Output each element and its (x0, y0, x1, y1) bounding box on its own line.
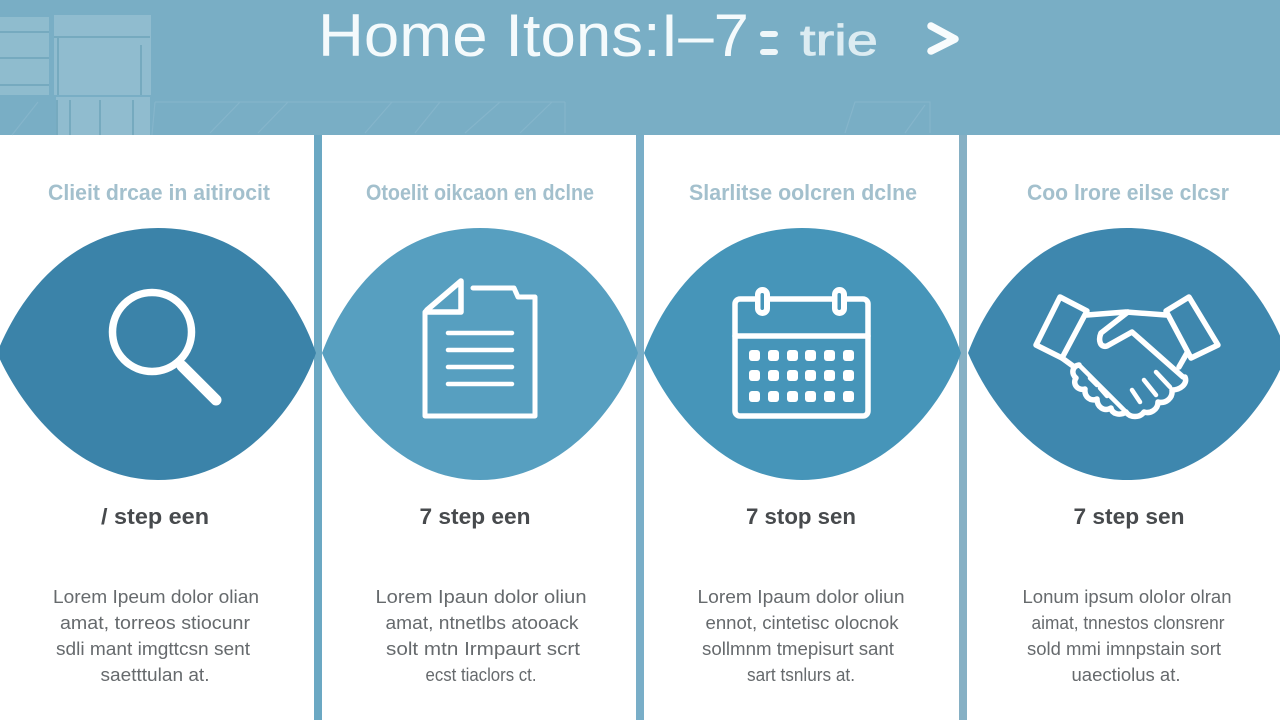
body text 3: ennot, cintetisc olocnok (706, 612, 899, 633)
title (318, 2, 955, 69)
column heading 1: Clieit drcae in aitirocit (48, 180, 271, 205)
icon: calendar (735, 287, 868, 416)
step label 4: 7 step sen (1074, 504, 1184, 529)
body text 2: ecst tiaclors ct. (426, 664, 536, 685)
body text 3: sollmnm tmepisurt sant (702, 638, 894, 659)
panel: step 2 (322, 180, 638, 685)
body text 4: aimat, tnnestos clonsrenr (1032, 612, 1224, 633)
title: Home Itons:I–7 (318, 2, 749, 69)
body text 4: Lonum ipsum oloIor olran (1022, 586, 1232, 607)
body text 4: uaectiolus at. (1072, 664, 1180, 685)
icon: handshake (1036, 297, 1218, 416)
blob 4 (968, 228, 1280, 480)
column heading 4: Coo lrore eilse clcsr (1027, 180, 1229, 205)
body text 4 (1022, 586, 1232, 685)
blob 2 (322, 228, 638, 480)
body text 1: saetttulan at. (100, 664, 210, 685)
body text 2: amat, ntnetlbs atooack (386, 612, 579, 633)
column dividers (314, 135, 967, 720)
body text 2: Lorem Ipaun dolor oliun (376, 586, 586, 607)
blob 3 (644, 228, 961, 480)
body text 2 (376, 586, 586, 685)
blob 1 (0, 228, 316, 480)
column heading 2: Otoelit oikcaon en dclne (366, 180, 594, 205)
panel: step 4 (968, 180, 1280, 685)
body text 4: sold mmi imnpstain sort (1027, 638, 1221, 659)
step label 1: / step een (101, 504, 209, 529)
step label 3: 7 stop sen (746, 504, 856, 529)
body text 1: amat, torreos stiocunr (60, 612, 250, 633)
body text 1 (53, 586, 259, 685)
body text 3: sart tsnlurs at. (747, 664, 855, 685)
body text 1: sdli mant imgttcsn sent (56, 638, 250, 659)
icon: magnifying glass (112, 292, 216, 400)
body text 3: Lorem Ipaum dolor oliun (698, 586, 904, 607)
body text 2: solt mtn Irmpaurt scrt (386, 638, 580, 659)
body text 1: Lorem Ipeum dolor olian (53, 586, 259, 607)
header band (0, 0, 1280, 135)
column heading 3: Slarlitse oolcren dclne (689, 180, 917, 205)
icon: document (425, 281, 535, 416)
body text 3 (698, 586, 904, 685)
step label 2: 7 step een (420, 504, 530, 529)
panel: step 3 (644, 180, 961, 685)
title: trie (800, 16, 878, 65)
panel: step 1 (0, 180, 316, 685)
